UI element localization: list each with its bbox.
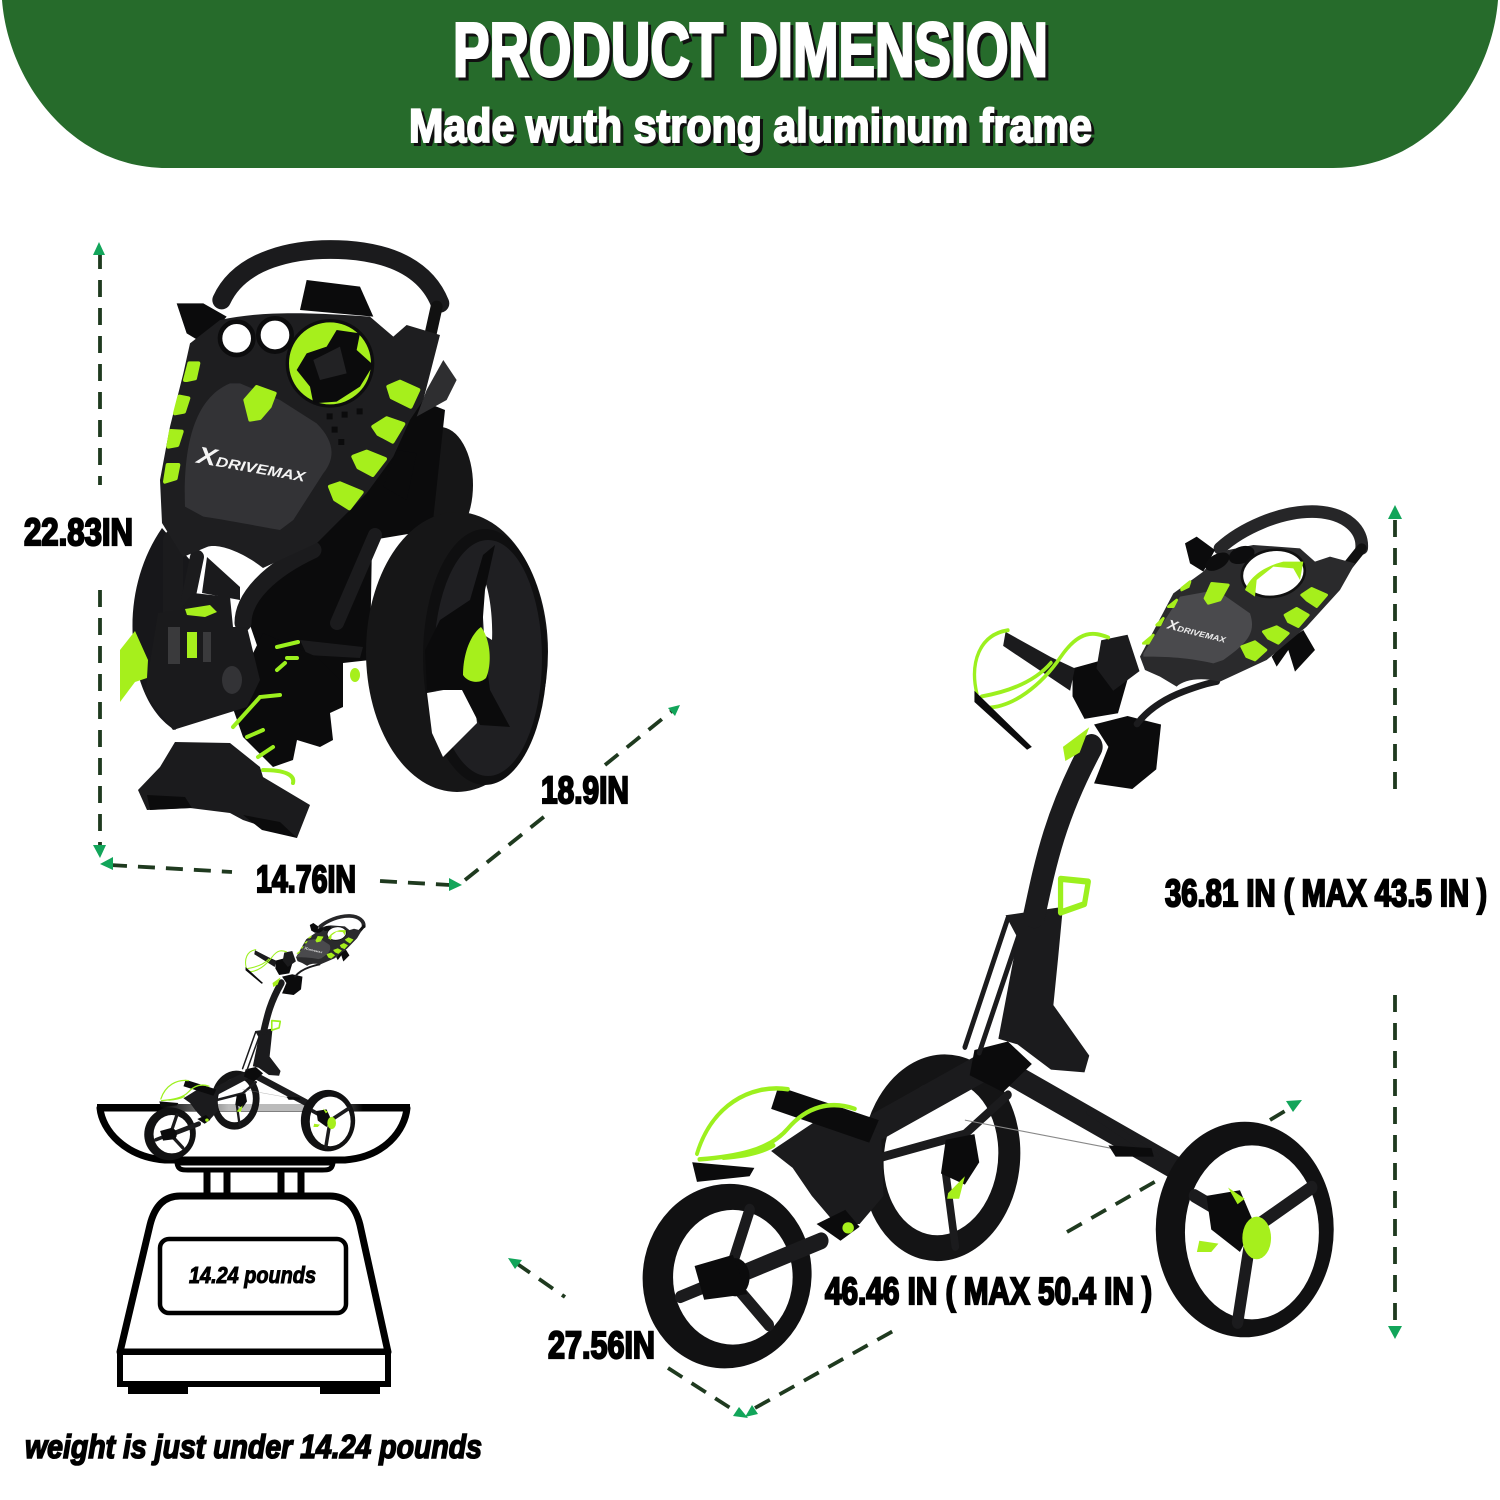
upright cart photo [630, 512, 1362, 1384]
dimension: folded depth [465, 705, 680, 880]
wheel hole [427, 687, 477, 757]
tray strap [383, 450, 417, 500]
scale feet [128, 1386, 380, 1394]
dimension: folded width: 14.76IN [256, 859, 356, 901]
wheel spokes [425, 545, 510, 727]
tray body [160, 313, 440, 568]
dimension: open length [755, 1100, 1302, 1408]
tray and handle [160, 250, 457, 568]
subtitle: Made wuth strong aluminum frame [409, 99, 1092, 152]
lower mechanism cluster [230, 633, 343, 767]
dimension: folded height [24, 242, 133, 858]
green lock pads [185, 605, 217, 658]
folded cart photo [120, 250, 548, 838]
umbrella holder [287, 321, 373, 406]
dimension: open height [1165, 505, 1487, 1339]
green lever [120, 631, 148, 702]
handle [222, 250, 440, 303]
green pad [245, 387, 275, 420]
cup holes [220, 322, 253, 355]
scale base [120, 1352, 388, 1384]
right plate [417, 360, 457, 417]
logo plate [185, 383, 332, 530]
dimension: folded height: 22.83IN [24, 512, 133, 554]
front wheel tyre [366, 512, 548, 792]
frame behind [250, 400, 445, 690]
dimension: open width: 27.56IN [548, 1325, 655, 1367]
dimension: open length: 46.46 IN ( MAX 50.4 IN ) [825, 1271, 1152, 1313]
dimension: folded depth: 18.9IN [541, 770, 629, 812]
bolt holes [327, 408, 363, 445]
weight caption: weight is just under 14.24 pounds [25, 1428, 482, 1465]
scale display [160, 1239, 346, 1313]
title: PRODUCT DIMENSION [453, 8, 1048, 93]
scale legs [207, 1170, 301, 1194]
green grips [165, 363, 418, 508]
wheel hub [463, 627, 490, 682]
rear wheel behind [407, 427, 473, 543]
foot bracket [138, 742, 310, 838]
display value: 14.24 pounds [189, 1262, 316, 1288]
dimension: open width [508, 1258, 758, 1418]
cart on scale [140, 916, 364, 1165]
brake cords [233, 642, 298, 813]
scale plate [177, 1163, 333, 1170]
weighing scale icon [97, 1104, 410, 1394]
side clip [177, 303, 227, 343]
scale body [120, 1196, 388, 1352]
left wheel behind [132, 528, 210, 730]
dimension: folded width [100, 857, 462, 901]
header banner [2, 0, 1498, 168]
logo text: XDRIVEMAX [193, 442, 310, 488]
scale bowl [100, 1108, 407, 1160]
rear bracket [300, 280, 373, 317]
latch box [145, 593, 260, 730]
